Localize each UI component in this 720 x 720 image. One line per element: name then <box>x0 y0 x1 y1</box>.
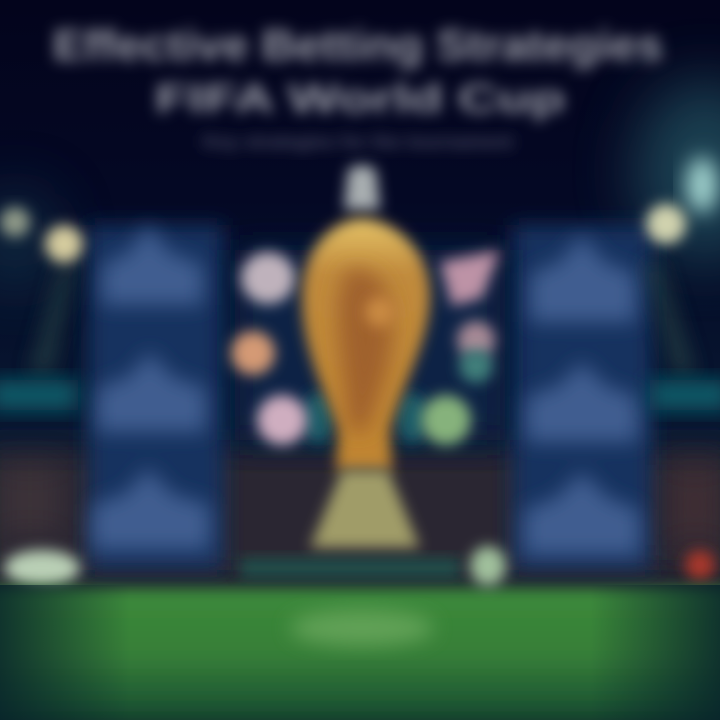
icon: middle left orange badge <box>231 331 275 375</box>
card: right top <box>530 235 636 322</box>
icon: lower left pink badge <box>302 392 334 444</box>
trophy <box>302 165 430 548</box>
panel: right strategy cards <box>524 235 640 555</box>
icon: middle right pink-green badge <box>457 321 495 359</box>
panel: left strategy cards <box>92 225 210 550</box>
trophy base <box>310 470 420 548</box>
card: left middle <box>97 352 206 432</box>
pitch <box>0 546 720 720</box>
card: right bottom <box>524 472 640 555</box>
floodlights: right <box>645 157 720 580</box>
trophy shading <box>338 269 392 430</box>
title: FIFA World Cup <box>155 77 565 121</box>
subtitle: Key strategies for the tournament <box>203 132 513 152</box>
title <box>53 21 663 121</box>
card: right middle <box>526 362 638 442</box>
card: left bottom <box>92 468 210 550</box>
icons around trophy <box>231 250 500 445</box>
card: left top <box>102 225 203 305</box>
icon: top right pink badge <box>440 250 500 306</box>
icon: top left pale badge <box>241 252 295 304</box>
trophy finial <box>344 165 380 210</box>
trophy body <box>302 218 430 470</box>
title: Effective Betting Strategies <box>53 21 663 70</box>
icon: lower right green badge <box>396 392 428 444</box>
trophy highlight <box>365 297 395 327</box>
floodlights: left <box>0 207 83 586</box>
